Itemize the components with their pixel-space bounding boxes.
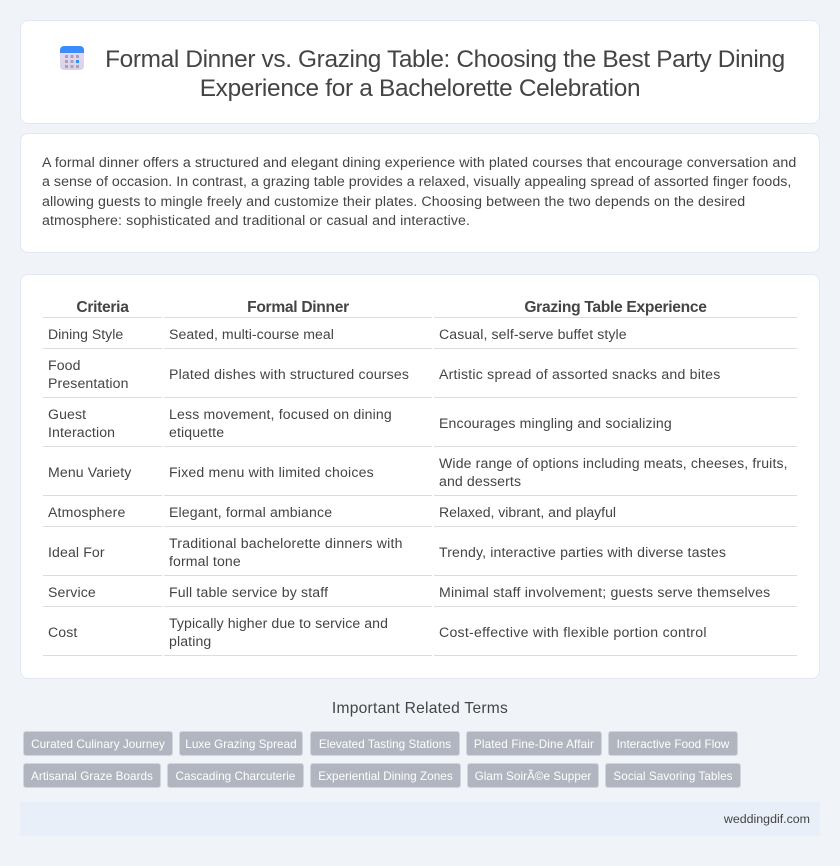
row: ideal for: formal tone bbox=[169, 553, 241, 569]
row: food presentation bbox=[48, 357, 721, 391]
row: ideal for bbox=[48, 535, 726, 569]
related term tags: Experiential Dining Zones bbox=[318, 770, 453, 783]
text block: introduction: a sense of occasion. In contrast, a grazing table provides a relaxed, visually appealing spread of assorted finger foods, bbox=[42, 174, 791, 190]
related term tags: Glam SoirÃ©e Supper bbox=[475, 770, 591, 783]
title: Formal Dinner vs. Grazing Table: Choosing the Best Party Dining bbox=[105, 46, 785, 73]
related term tags: Cascading Charcuterie bbox=[176, 770, 295, 783]
row: guest interaction: Interaction bbox=[48, 424, 115, 440]
row: menu variety: and desserts bbox=[439, 473, 521, 489]
panel: title card bbox=[20, 20, 820, 124]
panel: comparison table bbox=[20, 274, 820, 679]
table header: Formal Dinner bbox=[247, 299, 349, 316]
related term tags: Luxe Grazing Spread bbox=[185, 738, 297, 751]
row: atmosphere: Atmosphere bbox=[48, 504, 126, 520]
row: menu variety bbox=[48, 455, 788, 489]
row: food presentation: Artistic spread of assorted snacks and bites bbox=[439, 366, 721, 382]
row: guest interaction bbox=[48, 406, 672, 440]
row: cost: Cost-effective with flexible portion control bbox=[439, 624, 707, 640]
related term tags: Curated Culinary Journey bbox=[31, 738, 165, 751]
text block: introduction: atmosphere: sophisticated and traditional or casual and interactive. bbox=[42, 213, 470, 229]
row: menu variety: Wide range of options including meats, cheeses, fruits, bbox=[439, 455, 788, 471]
text block: introduction: A formal dinner offers a structured and elegant dining experience with plated courses that encourage conversation and bbox=[42, 155, 796, 171]
related term tags: Artisanal Graze Boards bbox=[31, 770, 153, 783]
row: guest interaction: Less movement, focused on dining bbox=[169, 406, 392, 422]
related term tags: Plated Fine-Dine Affair bbox=[474, 738, 594, 751]
row: guest interaction: Guest bbox=[48, 406, 86, 422]
table header: Criteria bbox=[76, 299, 129, 316]
row: dining style bbox=[48, 326, 627, 342]
related term tags: Interactive Food Flow bbox=[617, 738, 729, 751]
row: ideal for: Traditional bachelorette dinners with bbox=[169, 535, 403, 551]
row: cost bbox=[48, 615, 707, 649]
row: atmosphere bbox=[48, 504, 616, 520]
row: guest interaction: Encourages mingling and socializing bbox=[439, 415, 672, 431]
related term tags: Elevated Tasting Stations bbox=[319, 738, 451, 751]
row: service: Full table service by staff bbox=[169, 584, 328, 600]
title: Experience for a Bachelorette Celebration bbox=[200, 75, 640, 102]
row: menu variety: Menu Variety bbox=[48, 464, 131, 480]
row: food presentation: Food bbox=[48, 357, 81, 373]
title bbox=[105, 46, 785, 102]
comparison table bbox=[43, 299, 797, 656]
row: ideal for: Trendy, interactive parties with diverse tastes bbox=[439, 544, 726, 560]
row: atmosphere: Elegant, formal ambiance bbox=[169, 504, 332, 520]
related term tags bbox=[23, 731, 741, 788]
table header bbox=[76, 299, 707, 316]
row: cost: Cost bbox=[48, 624, 77, 640]
footer source text: weddingdif.com bbox=[724, 812, 810, 826]
table header: Grazing Table Experience bbox=[524, 299, 707, 316]
row: guest interaction: etiquette bbox=[169, 424, 224, 440]
panel: introduction bbox=[20, 133, 820, 253]
row: cost: Typically higher due to service and bbox=[169, 615, 388, 631]
row: food presentation: Plated dishes with structured courses bbox=[169, 366, 409, 382]
row: service: Minimal staff involvement; guests serve themselves bbox=[439, 584, 770, 600]
row: service: Service bbox=[48, 584, 96, 600]
row: menu variety: Fixed menu with limited choices bbox=[169, 464, 374, 480]
related term tags: Social Savoring Tables bbox=[613, 770, 733, 783]
row: service bbox=[48, 584, 770, 600]
row: dining style: Casual, self-serve buffet style bbox=[439, 326, 627, 342]
icon: calendar bbox=[60, 46, 84, 70]
row: food presentation: Presentation bbox=[48, 375, 129, 391]
row: cost: plating bbox=[169, 633, 211, 649]
text block: introduction: allowing guests to mingle freely and customize their plates. Choosing between the two depends on the desired bbox=[42, 194, 745, 210]
row: dining style: Dining Style bbox=[48, 326, 123, 342]
row: ideal for: Ideal For bbox=[48, 544, 105, 560]
text block: introduction bbox=[42, 155, 796, 229]
footer bbox=[20, 802, 820, 836]
row: atmosphere: Relaxed, vibrant, and playful bbox=[439, 504, 616, 520]
row: dining style: Seated, multi-course meal bbox=[169, 326, 334, 342]
heading: related terms: Important Related Terms bbox=[332, 700, 508, 717]
